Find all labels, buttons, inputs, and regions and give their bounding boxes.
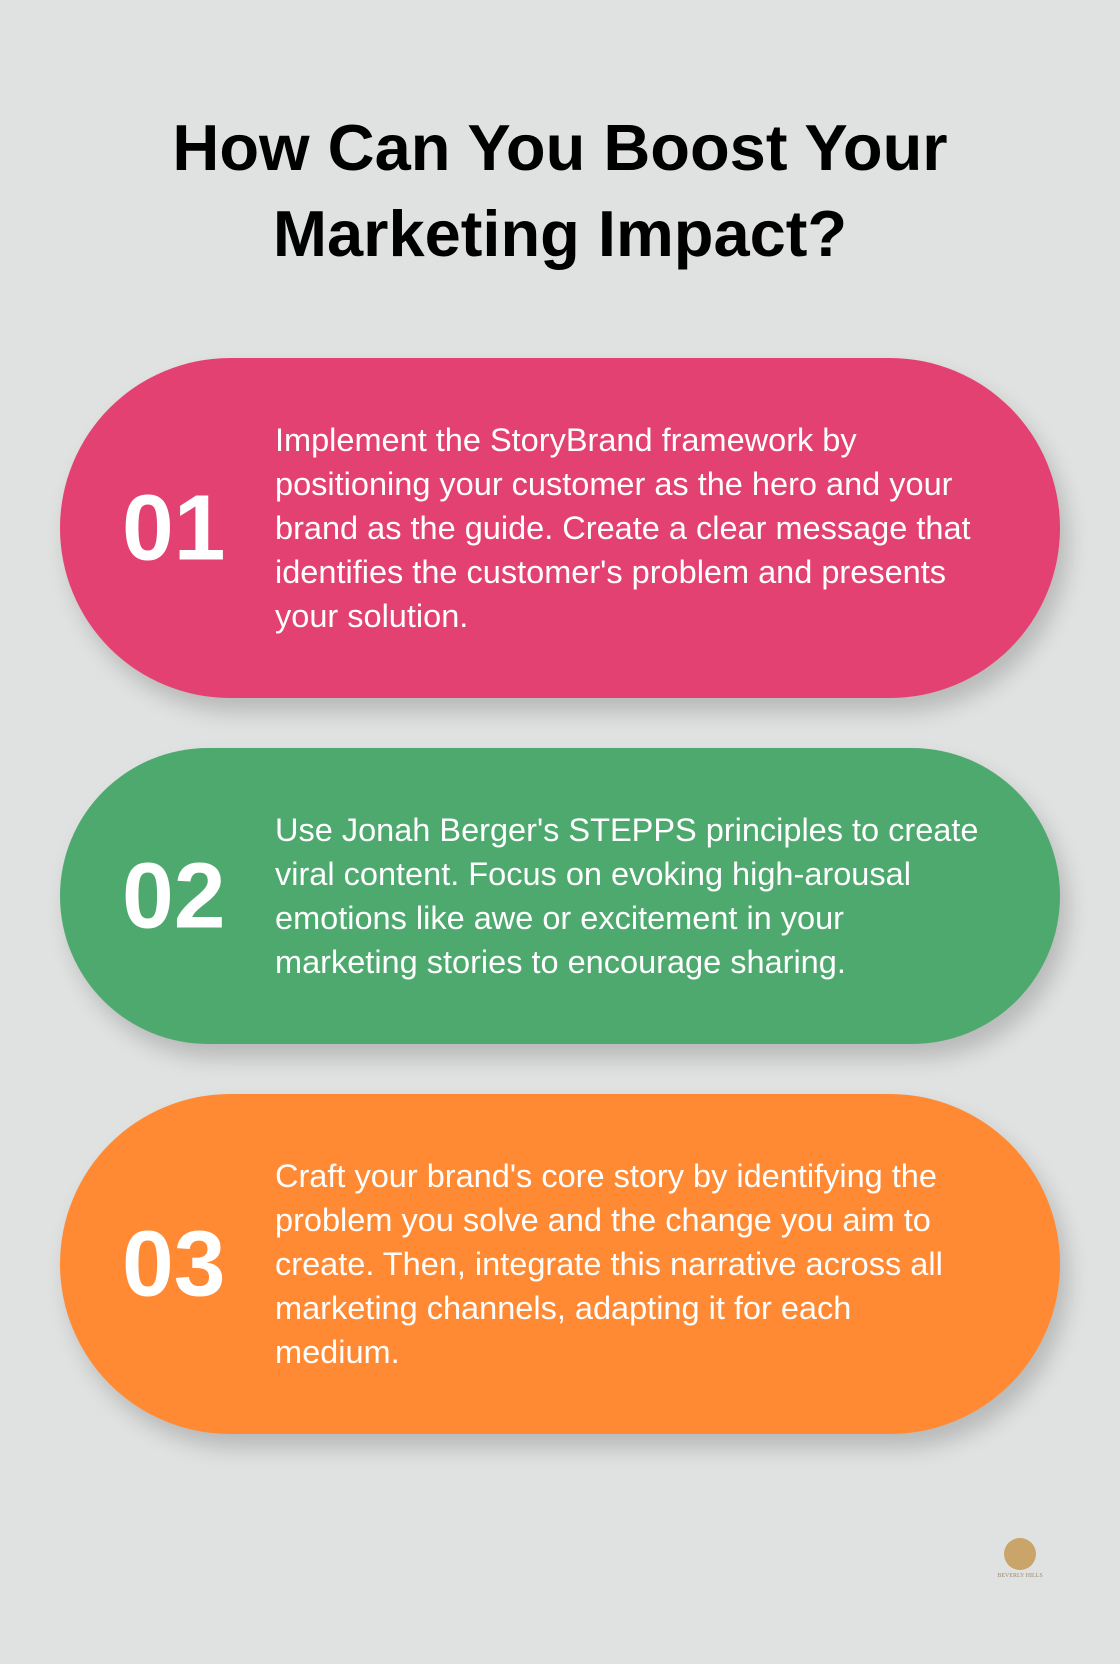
panel: step 02	[60, 748, 1060, 1044]
text 01: identifies the customer's problem and presents	[275, 554, 946, 590]
title: How Can You Boost Your	[172, 111, 948, 184]
text 03: problem you solve and the change you aim to	[275, 1202, 931, 1238]
text 01: your solution.	[275, 598, 468, 634]
text 03	[275, 1158, 943, 1370]
text 03: create. Then, integrate this narrative across all	[275, 1246, 943, 1282]
logo	[997, 1538, 1043, 1579]
text 01	[275, 422, 971, 634]
number 01: 01	[122, 476, 225, 580]
text 01: positioning your customer as the hero and your	[275, 466, 952, 502]
title	[172, 111, 948, 270]
text 02: viral content. Focus on evoking high-arousal	[275, 856, 911, 892]
title: Marketing Impact?	[273, 197, 847, 270]
text 03: marketing channels, adapting it for each	[275, 1290, 851, 1326]
panel: step 01	[60, 358, 1060, 698]
text 02: emotions like awe or excitement in your	[275, 900, 844, 936]
number 03: 03	[122, 1212, 225, 1316]
logo: BEVERLY HILLS	[997, 1573, 1043, 1579]
text 02: marketing stories to encourage sharing.	[275, 944, 846, 980]
text 01: Implement the StoryBrand framework by	[275, 422, 857, 458]
text 01: brand as the guide. Create a clear message that	[275, 510, 971, 546]
text 02	[275, 812, 978, 980]
text 02: Use Jonah Berger's STEPPS principles to create	[275, 812, 978, 848]
panel: step 03	[60, 1094, 1060, 1434]
text 03: medium.	[275, 1334, 400, 1370]
number 02: 02	[122, 844, 225, 948]
text 03: Craft your brand's core story by identifying the	[275, 1158, 937, 1194]
